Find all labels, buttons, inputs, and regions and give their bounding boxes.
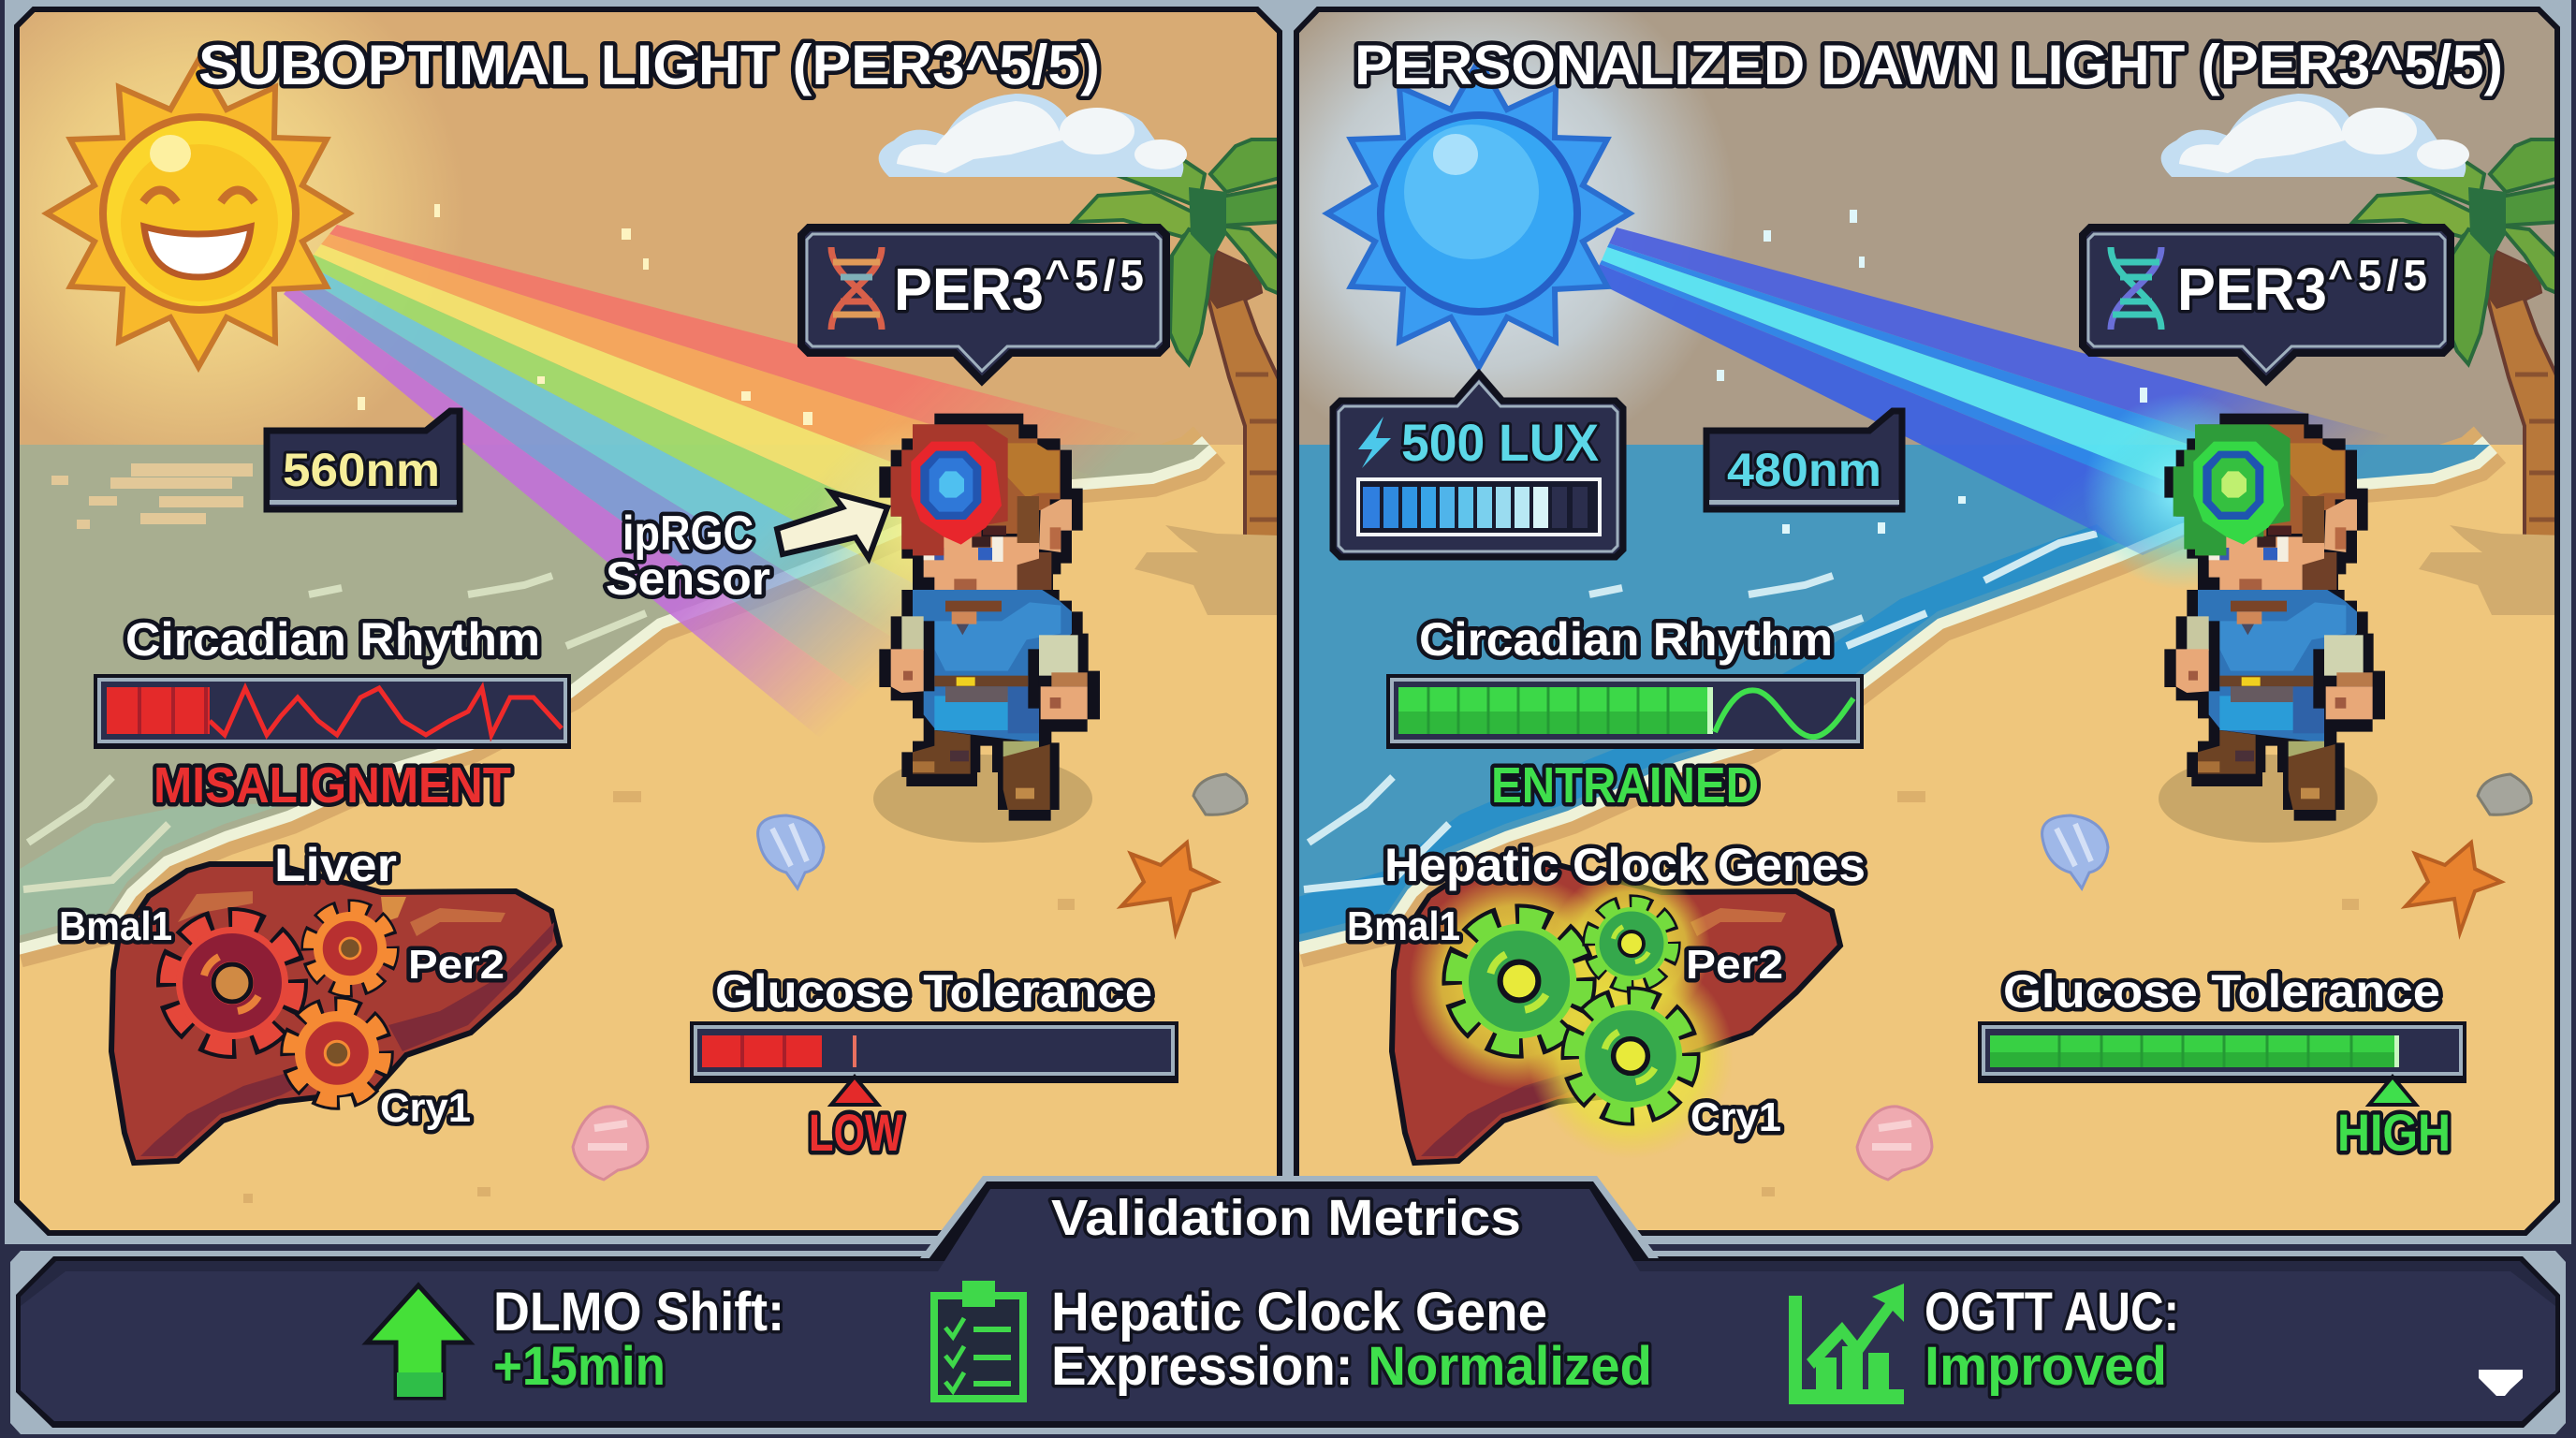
icon: rising chart — [1789, 1284, 1904, 1404]
icon: continue caret — [2479, 1370, 2523, 1396]
icon: lightning bolt — [1358, 417, 1391, 468]
wavelength tag 480nm — [1706, 411, 1902, 509]
gene label: PER3 — [894, 256, 1044, 323]
liver right: Hepatic Clock Genes — [1384, 839, 1866, 891]
right lobe shine — [410, 908, 505, 936]
rhythm bar — [94, 674, 571, 749]
liver left: Per2 — [408, 942, 505, 988]
gene superscript: ^5/5 — [2328, 251, 2427, 300]
glucose tolerance right: HIGH — [2337, 1103, 2451, 1162]
rainbow light beam — [284, 225, 1146, 740]
ipRGC sensor: red — [891, 424, 1008, 555]
rhythm bar — [1386, 674, 1864, 749]
panel: personalized dawn light — [1222, 0, 2565, 1240]
liver left — [59, 839, 560, 1163]
sea highlights — [51, 463, 253, 529]
metric: OGTT AUC — [1925, 1282, 2179, 1397]
liver highlight — [178, 891, 253, 922]
shore foam — [1297, 445, 2490, 944]
sea — [1292, 445, 2490, 944]
gene label: PER3 — [2177, 256, 2327, 323]
circadian rhythm right: ENTRAINED — [1491, 757, 1759, 814]
panel: suboptimal light — [0, 0, 1282, 1240]
sun inner light — [1404, 125, 1539, 259]
beach decorations — [243, 525, 1280, 1203]
sea waves — [23, 576, 646, 889]
metric: DLMO shift: +15min — [493, 1336, 666, 1397]
sun highlight — [150, 135, 191, 172]
metric: OGTT AUC: OGTT AUC: — [1925, 1282, 2179, 1343]
palm tree — [2353, 139, 2559, 565]
entrained waveform — [1715, 690, 1853, 737]
gear: Cry1 — [289, 1005, 385, 1101]
sky — [1292, 9, 2565, 446]
liver right — [1347, 839, 1866, 1163]
left sun — [47, 60, 349, 367]
sun highlight — [1433, 134, 1478, 175]
glucose tolerance right: Glucose Tolerance — [2003, 965, 2440, 1018]
gene superscript: ^5/5 — [1045, 251, 1144, 300]
sun glow — [20, 12, 434, 445]
genotype callout left — [801, 227, 1166, 381]
circadian rhythm left: MISALIGNMENT — [154, 757, 511, 814]
title left: SUBOPTIMAL LIGHT (PER3^5/5) — [198, 34, 1100, 96]
marker — [2369, 1077, 2416, 1105]
palm tree — [1074, 139, 1280, 565]
ipRGC sensor label: Sensor — [606, 552, 770, 605]
ipRGC sensor label — [606, 492, 887, 605]
beam glow at head — [826, 435, 913, 603]
ipRGC sensor label: ipRGC — [622, 506, 754, 561]
lobe gap — [381, 897, 406, 922]
metric: hepatic clock gene expression — [1051, 1282, 1652, 1397]
right sun — [1327, 60, 1630, 367]
sea — [17, 445, 1209, 944]
liver right: Cry1 — [1690, 1094, 1781, 1140]
icon: clipboard — [934, 1281, 1023, 1399]
intensity callout 500 LUX — [1333, 374, 1623, 557]
shore foam — [17, 445, 1209, 944]
glucose tolerance right — [1978, 965, 2466, 1162]
gear: Bmal1 — [168, 919, 296, 1047]
title right: PERSONALIZED DAWN LIGHT (PER3^5/5) — [1354, 34, 2503, 96]
icon: dna teal — [2111, 247, 2161, 330]
sky — [17, 9, 1282, 446]
wavelength tag 480nm: 480nm — [1727, 444, 1881, 496]
character — [873, 414, 1100, 843]
icon: green up arrow — [367, 1285, 470, 1398]
sun inner shading — [121, 144, 278, 301]
circadian rhythm left: Circadian Rhythm — [125, 613, 540, 666]
liver left: Bmal1 — [59, 903, 172, 949]
gear: Per2 — [309, 907, 391, 990]
icon: dna salmon — [831, 247, 882, 330]
gear glow — [1551, 868, 1710, 1027]
liver left: Cry1 — [380, 1085, 471, 1131]
tab: validation metrics: Validation Metrics — [1051, 1190, 1521, 1246]
glucose tolerance left — [690, 965, 1178, 1162]
sparkles — [1717, 210, 2147, 534]
sea waves — [1304, 534, 2097, 889]
blue light beam — [1592, 227, 2406, 555]
beam glow at head — [2083, 393, 2279, 590]
metric: DLMO shift: DLMO Shift: — [493, 1282, 784, 1343]
liver shading — [140, 1072, 309, 1156]
metric: DLMO shift — [493, 1282, 784, 1397]
liver left: Liver — [274, 839, 397, 891]
beach decorations — [1762, 525, 2554, 1196]
panel: validation metrics — [0, 1176, 2576, 1438]
sparkles — [358, 204, 812, 425]
sun glow — [1299, 12, 1724, 410]
circadian rhythm left — [94, 613, 571, 814]
circadian rhythm right — [1386, 613, 1864, 814]
glucose tolerance left: LOW — [809, 1103, 903, 1162]
arrow to sensor — [777, 492, 887, 558]
sand — [1292, 445, 2565, 1240]
metric: hepatic clock gene expression: Expression: Normalized — [1051, 1336, 1652, 1397]
sun eyes — [143, 190, 255, 202]
marker — [831, 1077, 878, 1105]
character — [2159, 414, 2385, 843]
cloud — [2161, 94, 2469, 177]
wavelength tag 560nm: 560nm — [283, 444, 440, 496]
intensity callout 500 LUX: 500 LUX — [1401, 413, 1599, 472]
metric: hepatic clock gene expression: Hepatic Clock Gene — [1051, 1282, 1547, 1343]
metric: OGTT AUC: Improved — [1925, 1336, 2167, 1397]
ipRGC sensor: green — [2174, 424, 2291, 555]
tab: validation metrics — [920, 1176, 1659, 1271]
right lobe shine — [1690, 908, 1786, 936]
liver right: Per2 — [1686, 942, 1783, 988]
sun mouth — [144, 227, 251, 277]
liver right: Bmal1 — [1347, 903, 1460, 949]
gear: Per2 — [1590, 902, 1673, 985]
lux level bar — [1358, 479, 1600, 535]
glucose bar — [1978, 1021, 2466, 1083]
glucose tolerance left: Glucose Tolerance — [715, 965, 1152, 1018]
circadian rhythm right: Circadian Rhythm — [1419, 613, 1833, 666]
gear glow — [1528, 953, 1734, 1159]
right lobe shading — [388, 922, 554, 1051]
glucose bar — [690, 1021, 1178, 1083]
genotype callout right — [2083, 227, 2451, 381]
erratic waveform — [210, 688, 562, 735]
sun disc — [103, 117, 296, 310]
shallow sea tint — [17, 803, 287, 936]
cloud — [879, 94, 1187, 177]
gear: Cry1 — [1572, 997, 1690, 1115]
wavelength tag 560nm — [267, 411, 460, 509]
sun disc — [1381, 115, 1577, 312]
gear glow — [1409, 873, 1624, 1089]
liver shading — [1421, 1072, 1589, 1156]
shallow sea band — [1292, 524, 2118, 936]
sand — [17, 445, 1282, 1240]
gear: Bmal1 — [1455, 917, 1584, 1046]
